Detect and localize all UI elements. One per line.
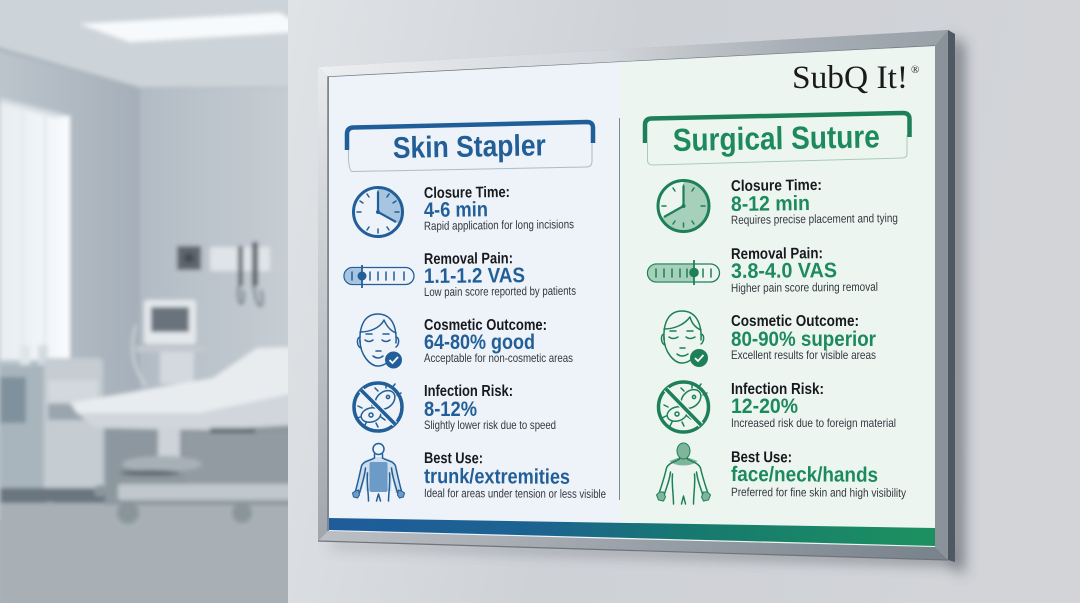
row: cosmetic outcome: Excellent results for visible areas — [731, 348, 876, 362]
row: removal pain — [344, 250, 576, 299]
heading: skin stapler — [347, 122, 593, 172]
row: removal pain: Higher pain score during removal — [731, 280, 878, 295]
row: cosmetic outcome — [661, 311, 876, 367]
panel shadow — [330, 35, 964, 575]
row: best use: Ideal for areas under tension or less visible — [424, 486, 606, 501]
row: best use: Preferred for fine skin and high visibility — [731, 485, 906, 500]
row: cosmetic outcome: Acceptable for non-cosmetic areas — [424, 351, 573, 365]
row: best use: Best Use: — [731, 449, 792, 466]
wall — [288, 0, 1080, 603]
row: best use: face/neck/hands — [731, 463, 878, 487]
row: removal pain — [648, 245, 878, 295]
icon: no bacteria — [354, 383, 402, 431]
row: closure time — [354, 184, 574, 236]
row: removal pain: Low pain score reported by patients — [424, 284, 576, 299]
row: infection risk: 8-12% — [424, 398, 477, 421]
row: closure time: 8-12 min — [731, 192, 810, 216]
logo: SubQ It!: SubQ It! — [792, 60, 908, 96]
row: removal pain: 1.1-1.2 VAS — [424, 264, 525, 288]
row: cosmetic outcome: 80-90% superior — [731, 328, 876, 351]
row: cosmetic outcome: 64-80% good — [424, 331, 535, 354]
row: closure time: Closure Time: — [424, 184, 510, 202]
icon: no bacteria — [658, 382, 708, 432]
row: cosmetic outcome — [357, 314, 573, 368]
row: infection risk: Slightly lower risk due to speed — [424, 418, 556, 432]
icon: clock — [658, 180, 709, 232]
row: infection risk: Infection Risk: — [424, 383, 513, 400]
column: surgical suture — [645, 113, 910, 504]
logo: SubQ It!: ® — [911, 64, 919, 76]
row: removal pain: 3.8-4.0 VAS — [731, 259, 837, 283]
row: removal pain: Removal Pain: — [731, 245, 823, 263]
heading: surgical suture — [645, 113, 910, 165]
panel: surgical suture background — [620, 46, 935, 547]
heading: skin stapler: Skin Stapler — [393, 129, 546, 165]
row: cosmetic outcome: Cosmetic Outcome: — [424, 317, 547, 334]
row: infection risk: Infection Risk: — [731, 381, 824, 398]
row: closure time: 4-6 min — [424, 198, 488, 222]
background: clinic room — [0, 0, 298, 603]
row: closure time — [658, 177, 898, 232]
heading: surgical suture: Surgical Suture — [672, 118, 880, 158]
row: infection risk — [354, 383, 556, 432]
row: removal pain: Removal Pain: — [424, 250, 513, 268]
icon: face with check — [357, 314, 402, 368]
row: closure time: Rapid application for long incisions — [424, 217, 574, 233]
center divider — [618, 118, 620, 500]
icon: clock — [354, 188, 402, 236]
board frame — [318, 30, 955, 562]
row: closure time: Requires precise placement and tying — [731, 211, 898, 227]
icon: body trunk highlighted — [352, 444, 404, 501]
row: closure time: Closure Time: — [731, 177, 822, 195]
row: infection risk: 12-20% — [731, 395, 798, 418]
row: infection risk: Increased risk due to foreign material — [731, 416, 896, 430]
row: best use: Best Use: — [424, 450, 483, 467]
icon: pain slider — [648, 260, 720, 285]
row: cosmetic outcome: Cosmetic Outcome: — [731, 313, 859, 330]
row: best use — [656, 443, 906, 504]
row: best use: trunk/extremities — [424, 465, 570, 489]
footer gradient bar — [329, 518, 935, 546]
icon: body head highlighted — [656, 443, 710, 504]
column: skin stapler — [344, 122, 606, 501]
icon: pain slider — [344, 265, 414, 288]
icon: face with check — [661, 311, 708, 367]
row: best use — [352, 444, 606, 501]
poster — [329, 46, 935, 547]
panel: skin stapler background — [329, 62, 620, 539]
row: infection risk — [658, 381, 896, 432]
